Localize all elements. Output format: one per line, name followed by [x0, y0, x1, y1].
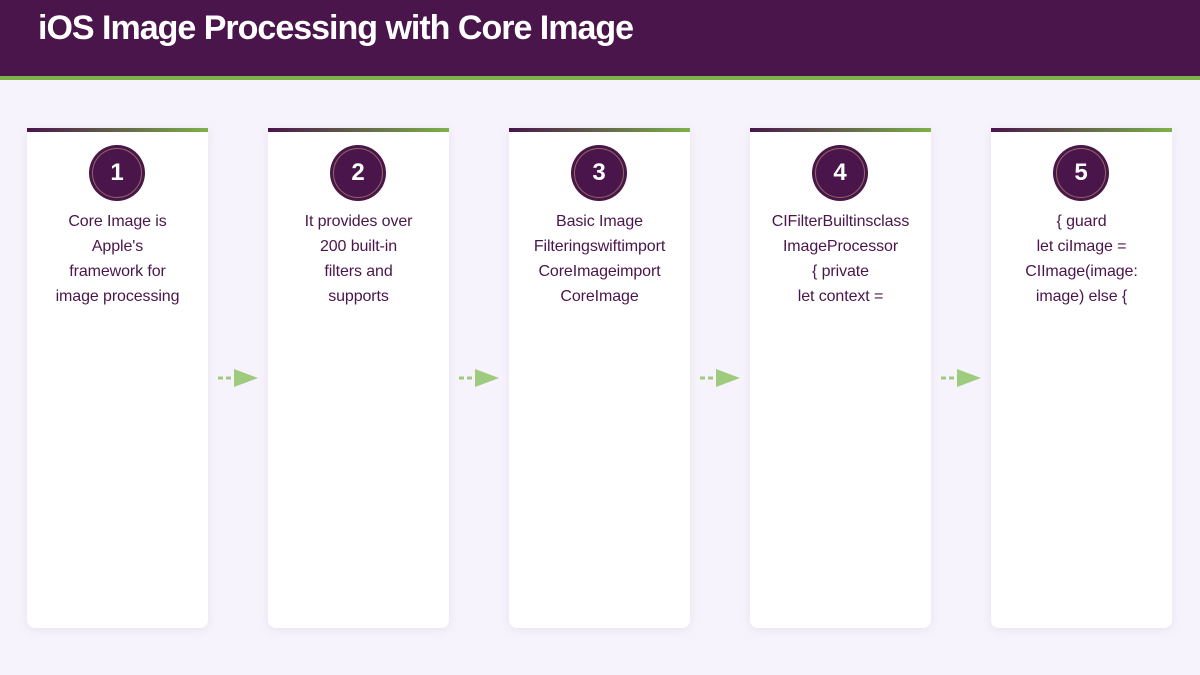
text 3: CoreImage — [560, 288, 639, 305]
arrow 1 — [218, 369, 258, 387]
text 2: filters and — [324, 263, 393, 280]
step number 3 — [571, 145, 627, 201]
step number 1 — [89, 145, 145, 201]
text 5 — [1025, 213, 1138, 305]
step number 5: 5 — [1074, 159, 1088, 186]
step number 4 — [812, 145, 868, 201]
card 1 — [27, 128, 208, 628]
step number 2 — [330, 145, 386, 201]
text 2: supports — [328, 288, 389, 305]
text 5: { guard — [1056, 213, 1106, 230]
text 2: 200 built-in — [320, 238, 397, 255]
text 5: let ciImage = — [1037, 238, 1126, 255]
text 2: It provides over — [305, 213, 412, 230]
card 5 — [991, 128, 1172, 628]
text 1: Apple's — [92, 238, 143, 255]
text 3: CoreImageimport — [538, 263, 661, 280]
text 1 — [56, 213, 179, 305]
text 1: image processing — [56, 288, 179, 305]
arrow 4 — [941, 369, 981, 387]
card 3 — [509, 128, 690, 628]
text 3: Filteringswiftimport — [534, 238, 665, 255]
arrow 2 — [459, 369, 499, 387]
text 3: Basic Image — [556, 213, 643, 230]
text 4: CIFilterBuiltinsclass — [772, 213, 909, 230]
step number 2: 2 — [351, 159, 365, 186]
step number 4: 4 — [833, 159, 847, 186]
text 4: { private — [812, 263, 869, 280]
text 2 — [305, 213, 412, 305]
text 5: image) else { — [1036, 288, 1127, 305]
title: iOS Image Processing with Core Image — [38, 9, 633, 47]
text 4: ImageProcessor — [783, 238, 898, 255]
step number 5 — [1053, 145, 1109, 201]
card 2 — [268, 128, 449, 628]
text 3 — [534, 213, 666, 305]
step number 1: 1 — [110, 159, 124, 186]
card 4 — [750, 128, 931, 628]
text 5: CIImage(image: — [1025, 263, 1138, 280]
step number 3: 3 — [592, 159, 606, 186]
text 4 — [772, 213, 909, 305]
text 4: let context = — [798, 288, 883, 305]
header — [0, 0, 1200, 80]
arrow 3 — [700, 369, 740, 387]
text 1: framework for — [69, 263, 166, 280]
text 1: Core Image is — [68, 213, 167, 230]
